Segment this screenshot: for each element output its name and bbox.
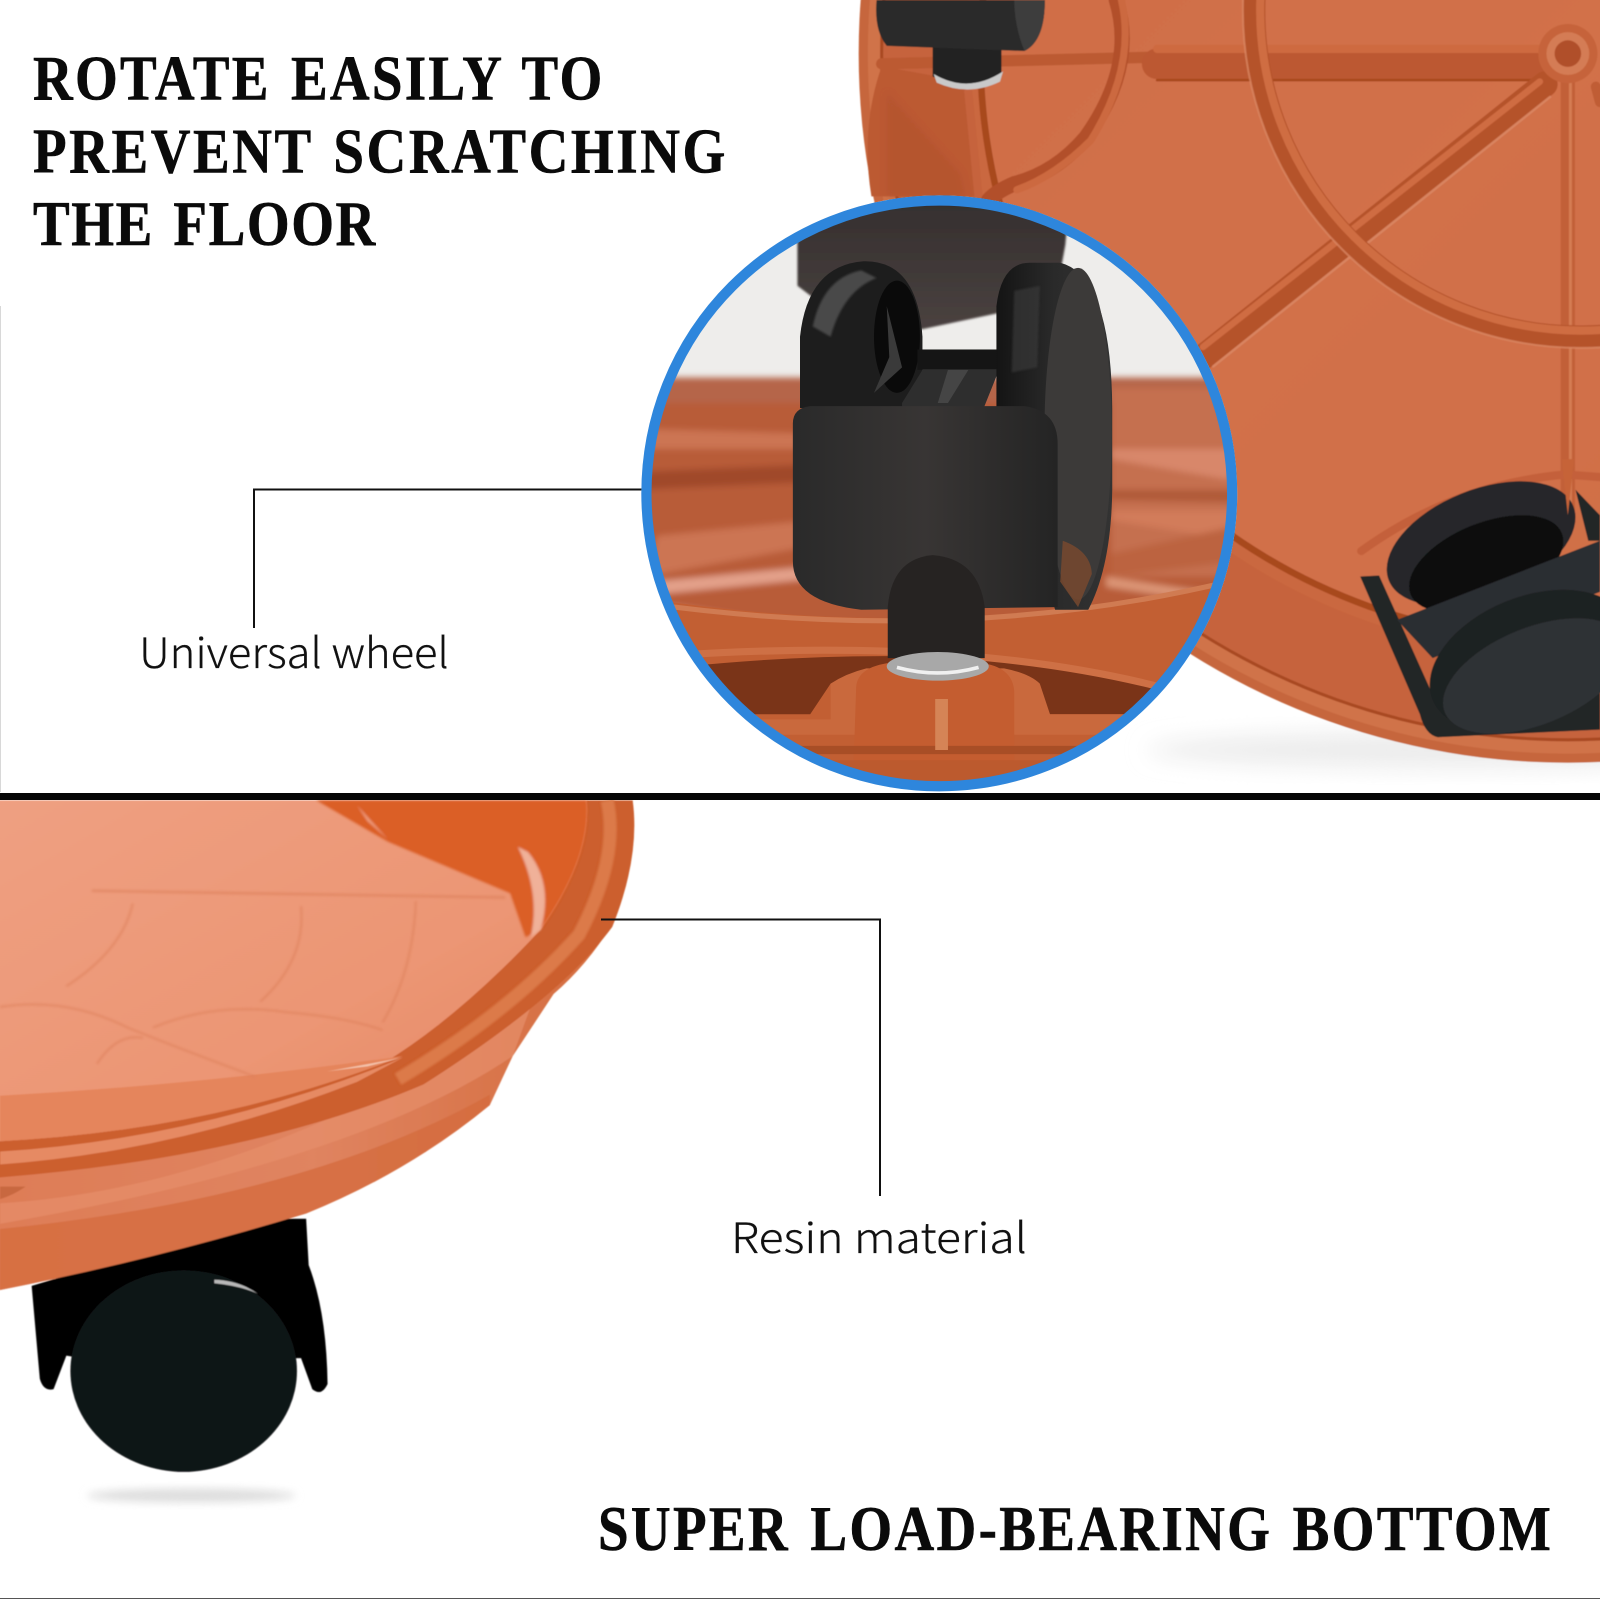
bottom edge line [0, 1598, 1600, 1599]
caster fork [793, 406, 1058, 610]
inset: caster close-up [637, 189, 1249, 816]
caster axle [917, 349, 1004, 370]
bowl interior [0, 800, 587, 1141]
heading: super load-bearing bottom: SUPER LOAD-BEARING BOTTOM [598, 1493, 1551, 1564]
rib tip over wheel [1564, 459, 1572, 515]
heading: rotate easily: ROTATE EASILY TO [33, 43, 602, 113]
bowl rim [0, 800, 634, 1177]
inset blurred tray [652, 372, 1228, 618]
interior dark reflection [316, 800, 587, 937]
panel: rotate easily (top section) [254, 0, 1600, 816]
label: resin material: Resin material [731, 1205, 1027, 1266]
caster left wheel [800, 261, 922, 408]
rim shadow top left [868, 66, 979, 196]
floor shadow [87, 1489, 296, 1502]
heading: rotate easily [33, 43, 725, 259]
inset ring [646, 201, 1232, 786]
caster [32, 1219, 328, 1472]
callout line: universal wheel [254, 490, 645, 628]
inset foreground tray [673, 588, 1210, 760]
bowl outer wall [0, 800, 633, 1290]
panel: resin bowl (bottom section) [0, 800, 880, 1502]
interior embossed lines [0, 891, 505, 1077]
label: universal wheel: Universal wheel [139, 620, 449, 681]
bottom right wheel [1360, 480, 1600, 738]
top wheel [876, 0, 1045, 90]
inset background [637, 194, 1249, 388]
caster stem [888, 555, 985, 658]
ribs [882, 0, 1600, 551]
heading: rotate easily: PREVENT SCRATCHING [33, 116, 725, 186]
heading: rotate easily: THE FLOOR [33, 188, 376, 259]
callout line: resin material [601, 920, 880, 1196]
divider [0, 793, 1600, 800]
hub [1538, 24, 1597, 83]
photo: tray underside [859, 0, 1600, 768]
caster right wheel [996, 263, 1112, 610]
